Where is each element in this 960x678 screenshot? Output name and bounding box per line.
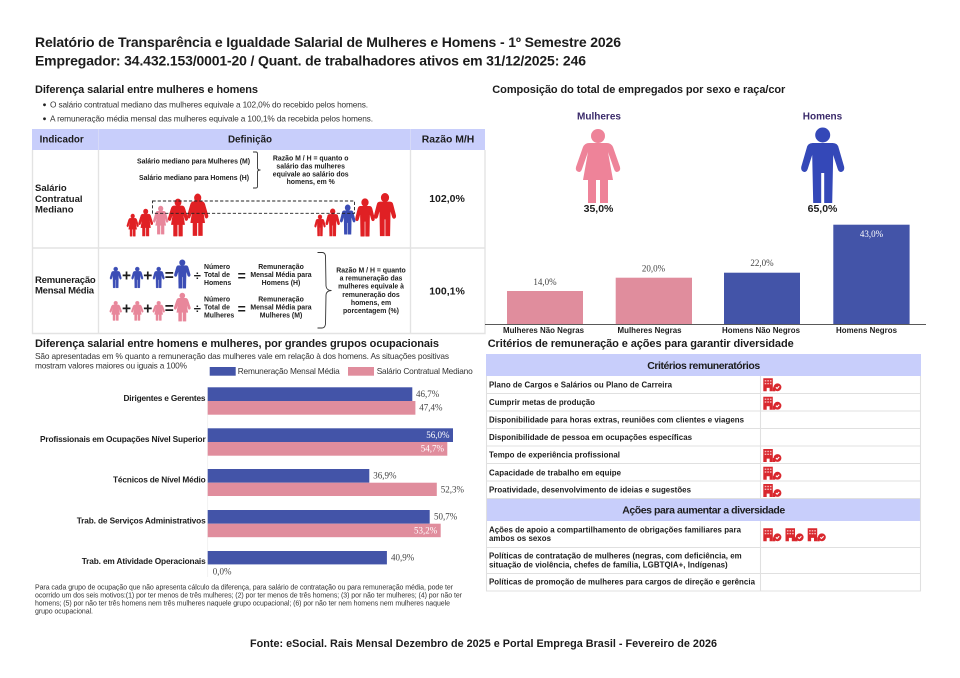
women average formula: Remuneração <box>258 297 304 304</box>
women median figures <box>127 194 208 236</box>
heading: salary difference: Diferença salarial entre mulheres e homens <box>35 84 258 96</box>
action rows: ambos os sexos <box>489 534 552 543</box>
bar: black men: 43,0% <box>860 229 884 239</box>
group: managers: Dirigentes e Gerentes <box>124 393 206 403</box>
group: operations: 40,9% <box>391 553 415 563</box>
group: technicians: Técnicos de Nível Médio <box>113 475 206 485</box>
heading: criteria: Critérios de remuneração e ações para garantir diversidade <box>488 338 794 350</box>
bar: non-black men: Homens Não Negros <box>722 326 801 335</box>
women average formula: = <box>165 300 174 318</box>
bar: black women <box>616 264 692 335</box>
criteria rows: Proatividade, desenvolvimento de ideias e sugestões <box>489 486 692 495</box>
group: technicians <box>113 469 464 496</box>
table header <box>40 134 474 146</box>
men average formula: ÷ <box>194 268 201 283</box>
row label: median salary <box>35 183 82 216</box>
chart legend: Remuneração Mensal Média <box>238 366 340 376</box>
action rows: Políticas de promoção de mulheres para cargos de direção e gerência <box>489 578 756 587</box>
bar: non-black women: 14,0% <box>533 277 557 287</box>
group: technicians: 36,9% <box>373 470 397 480</box>
chart legend: Salário Contratual Mediano <box>377 366 473 376</box>
criteria rows: Plano de Cargos e Salários ou Plano de Carreira <box>489 380 673 390</box>
women average formula: Mulheres (M) <box>260 313 302 320</box>
action rows: situação de violência, chefes de família, LGBTQIA+, Indígenas) <box>489 560 728 570</box>
women average formula <box>110 293 312 321</box>
median definition text <box>137 152 349 188</box>
median definition text: Salário mediano para Mulheres (M) <box>137 158 250 166</box>
footnote: grupo ocupacional. <box>35 608 93 616</box>
bullet summary: O salário contratual mediano das mulheres equivale a 102,0% do recebido pelos homens. <box>50 100 368 110</box>
median definition text: salário das mulheres <box>276 163 345 170</box>
icons: companies per action <box>763 528 826 541</box>
bar: black women: 20,0% <box>642 264 666 274</box>
group: professionals: 56,0% <box>426 430 450 440</box>
average ratio brace and text: porcentagem (%) <box>343 308 399 315</box>
dashed median box <box>152 201 354 213</box>
group: administrative: 53,2% <box>414 525 438 535</box>
criteria rows: Tempo de experiência profissional <box>489 451 620 460</box>
women average formula: Mulheres <box>204 313 234 320</box>
header: diversity actions: Ações para aumentar a diversidade <box>622 504 785 516</box>
occupational chart note: mostram valores maiores ou iguais a 100% <box>35 360 188 370</box>
median value: 102,0% <box>429 193 465 205</box>
average ratio brace and text <box>318 252 406 328</box>
report title: Relatório de Transparência e Igualdade Salarial de Mulheres e Homens - 1º Semestre 2026 <box>35 34 621 50</box>
women average formula: + <box>143 300 152 318</box>
table header: Indicador <box>40 134 84 146</box>
bar: non-black men: 22,0% <box>750 258 774 268</box>
men share <box>801 112 844 215</box>
footnote: homens; (5) por não ter três homens nem três mulheres naquele grupo ocupacional; (6) por não ter nem homens nem mulheres naquele <box>35 600 450 608</box>
men average formula: Mensal Média para <box>250 272 312 279</box>
group: professionals: Profissionais em Ocupações Nível Superior <box>40 434 206 444</box>
header: pay criteria: Critérios remuneratórios <box>647 360 760 372</box>
bar: non-black women: Mulheres Não Negras <box>503 326 585 335</box>
action rows <box>489 526 756 587</box>
group: professionals <box>40 428 453 456</box>
criteria rows: Capacidade de trabalho em equipe <box>489 468 622 477</box>
men share: Homens <box>803 112 843 122</box>
table header: Definição <box>228 134 272 146</box>
heading: occupational groups: Diferença salarial entre homens e mulheres, por grandes grupos ocupacionais <box>35 338 439 350</box>
women average formula: Total de <box>204 305 230 312</box>
criteria rows: Cumprir metas de produção <box>489 398 595 407</box>
row label: average pay: Mensal Média <box>35 286 95 296</box>
average value: 100,1% <box>429 286 465 298</box>
bar: non-black men <box>722 258 801 335</box>
men average formula: = <box>165 268 174 284</box>
group: managers <box>124 387 443 415</box>
men share: 65,0% <box>808 203 838 215</box>
bar: black men: Homens Negros <box>836 326 898 335</box>
average ratio brace and text: remuneração dos <box>342 292 400 299</box>
group: administrative: Trab. de Serviços Administrativos <box>77 515 206 525</box>
average ratio brace and text: Razão M / H = quanto <box>336 268 406 275</box>
bar: black women: Mulheres Negras <box>618 326 682 335</box>
men average formula <box>110 260 312 288</box>
women share: 35,0% <box>584 203 614 215</box>
men average formula: Homens (H) <box>262 280 300 287</box>
report title: Empregador: 34.432.153/0001-20 / Quant. de trabalhadores ativos em 31/12/2025: 246 <box>35 52 586 68</box>
group: technicians: 52,3% <box>441 484 464 494</box>
bar: black men <box>833 225 910 335</box>
bullet summary: A remuneração média mensal das mulheres equivale a 100,1% da recebida pelos homens. <box>50 114 373 124</box>
women share: Mulheres <box>577 112 621 122</box>
heading: composition: Composição do total de empregados por sexo e raça/cor <box>492 84 786 96</box>
occupational chart note <box>35 351 449 370</box>
women average formula: Número <box>204 297 230 304</box>
men average formula: + <box>143 268 152 284</box>
action rows: Políticas de contratação de mulheres (negras, com deficiência, em <box>489 552 742 560</box>
average ratio brace and text: a remuneração das <box>340 276 403 283</box>
icons: companies per criterion <box>763 378 781 497</box>
group: administrative <box>77 510 458 537</box>
group: managers: 47,4% <box>419 403 443 413</box>
men average formula: Total de <box>204 272 230 279</box>
bar chart: occupational groups <box>40 387 464 577</box>
men average formula: Homens <box>204 280 231 287</box>
footnote: Para cada grupo de ocupação que não apresenta cálculo da diferença, para salário de contratação ou para remuneração média, pode ter <box>35 584 454 592</box>
bar: non-black women <box>503 277 585 335</box>
panel: indicator table <box>32 129 485 334</box>
median definition text: equivale ao salário dos <box>273 171 349 178</box>
group: administrative: 50,7% <box>434 511 458 521</box>
table header: Razão M/H <box>422 134 474 146</box>
men average formula: Número <box>204 264 230 271</box>
row label: median salary: Salário <box>35 183 67 194</box>
action rows: Ações de apoio a compartilhamento de obrigações familiares para <box>489 526 742 534</box>
row label: median salary: Contratual <box>35 194 82 205</box>
occupational chart note: São apresentadas em % quanto a remuneração das mulheres vale em relação à dos homens. As situações positivas <box>35 351 449 361</box>
women share <box>576 112 621 215</box>
average ratio brace and text: homens, em <box>351 300 391 307</box>
group: operations <box>82 551 415 576</box>
average ratio brace and text: mulheres equivale à <box>338 284 404 291</box>
criteria rows: Disponibilidade para horas extras, reuniões com clientes e viagens <box>489 416 745 425</box>
median definition text: homens, em % <box>287 179 335 186</box>
footnote: ocorrido um dos seis motivos:(1) por ter menos de três mulheres; (2) por ter menos de três homens; (3) por não ter mulheres; (4) por não ter <box>35 592 463 600</box>
group: operations: 0,0% <box>213 566 232 576</box>
men average formula: = <box>238 268 246 284</box>
row label: median salary: Mediano <box>35 204 74 216</box>
row label: average pay <box>35 275 96 296</box>
women average formula: = <box>238 300 246 316</box>
men median figures <box>315 193 396 236</box>
men average formula: + <box>122 268 131 284</box>
criteria rows: Disponibilidade de pessoa em ocupações específicas <box>489 433 693 442</box>
group: operations: Trab. em Atividade Operacionais <box>82 556 206 566</box>
panel: criteria table <box>486 354 921 591</box>
women average formula: ÷ <box>194 301 201 316</box>
footnote <box>35 584 463 616</box>
report title <box>35 34 621 68</box>
men average formula: Remuneração <box>258 264 304 271</box>
median definition text: Salário mediano para Homens (H) <box>139 175 249 182</box>
bullet summary <box>43 100 373 124</box>
chart legend <box>210 366 473 376</box>
women average formula: Mensal Média para <box>250 305 312 312</box>
source line: Fonte: eSocial. Rais Mensal Dezembro de 2025 e Portal Emprega Brasil - Fevereiro de 2026 <box>250 638 717 650</box>
criteria rows <box>489 380 745 495</box>
women average formula: + <box>122 300 131 318</box>
bar chart: composition <box>485 225 926 335</box>
group: managers: 46,7% <box>416 389 440 399</box>
median definition text: Razão M / H = quanto o <box>273 155 349 162</box>
group: professionals: 54,7% <box>421 444 444 454</box>
row label: average pay: Remuneração <box>35 275 96 286</box>
